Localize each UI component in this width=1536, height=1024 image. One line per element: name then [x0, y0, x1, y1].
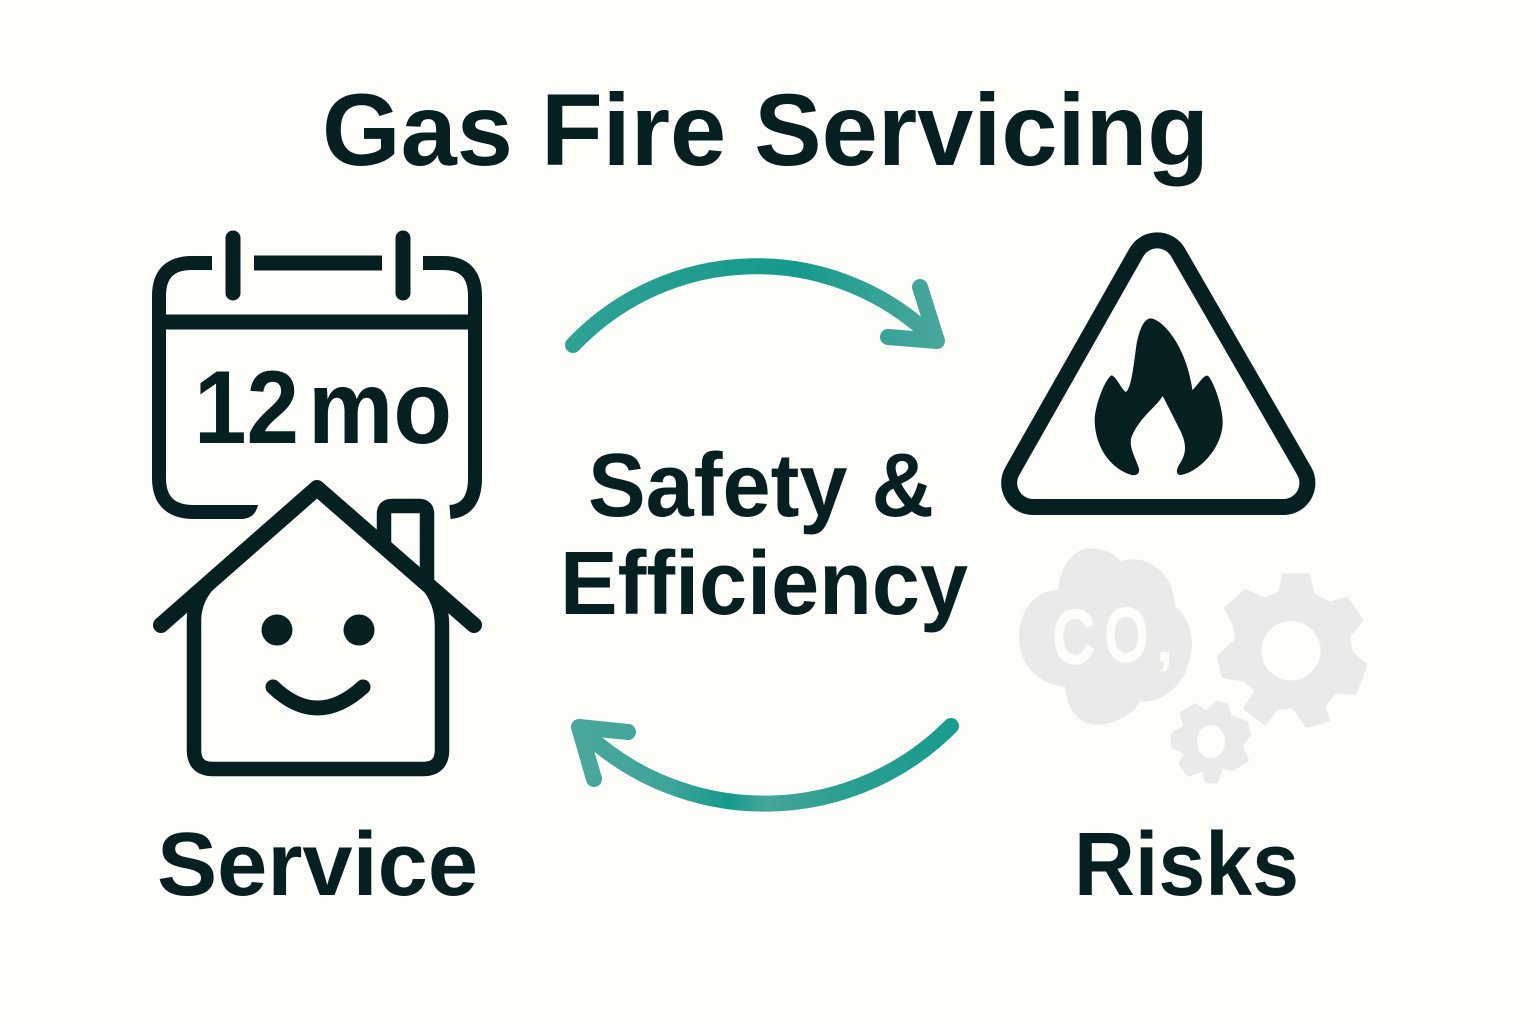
calendar text: 12 mo: [194, 350, 452, 466]
icon: smiling house: [161, 488, 474, 769]
icon: large gear: [1218, 575, 1366, 726]
icon: warning triangle with flame: [1009, 240, 1307, 507]
title: Gas Fire Servicing: [322, 73, 1209, 187]
house eyes: [262, 614, 374, 646]
center label: Efficiency: [560, 534, 968, 634]
center label: [560, 436, 968, 634]
icon: small gear: [1172, 702, 1249, 782]
calendar text: 12 mo: 12: [194, 350, 299, 466]
house smile: [273, 687, 363, 708]
cloud text: [1053, 596, 1174, 678]
icon: calendar: [159, 238, 475, 519]
center label: Safety &: [588, 436, 934, 536]
label: risks: Risks: [1074, 815, 1299, 915]
icon: CO2 cloud: [1019, 548, 1192, 725]
cloud text: C: [1053, 598, 1094, 678]
arrow: risks to service: [579, 726, 951, 804]
cloud text: O: [1105, 596, 1147, 676]
flame: [1095, 318, 1223, 475]
label: service: Service: [157, 815, 478, 915]
cloud text: ,: [1156, 605, 1174, 675]
calendar text: 12 mo: mo: [308, 350, 452, 466]
arrow: service to risks: [573, 266, 937, 345]
